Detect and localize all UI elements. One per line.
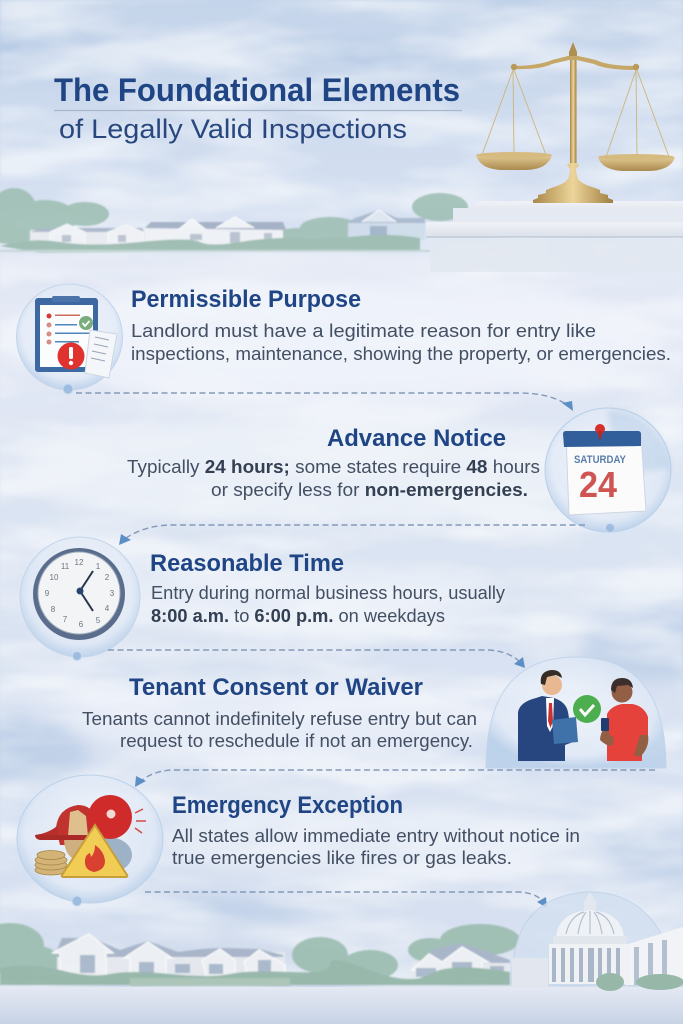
body text — [127, 456, 540, 500]
body text: or specify less for non-emergencies. — [211, 479, 528, 500]
trees — [0, 923, 520, 985]
panel: tenant consent or waiver — [82, 657, 666, 768]
icon: wall clock: 4 — [105, 604, 110, 613]
icon: wall clock: 7 — [63, 615, 68, 624]
body text: Entry during normal business hours, usually — [151, 582, 506, 603]
panel: permissible purpose — [16, 284, 671, 390]
side building left — [512, 958, 548, 988]
body text: inspections, maintenance, showing the property, or emergencies. — [131, 343, 671, 364]
panel: advance notice — [127, 408, 671, 532]
heading: Permissible Purpose — [131, 286, 361, 313]
body text: Typically 24 hours; some states require 48 hours — [127, 456, 540, 477]
heading: Tenant Consent or Waiver — [129, 674, 423, 701]
capitol dome — [556, 910, 624, 938]
arrow: step 4 to 5 — [135, 770, 655, 787]
body text — [151, 582, 506, 626]
icon: wall clock: 5 — [96, 616, 101, 625]
hedges and lawn — [0, 960, 510, 985]
heading: Reasonable Time — [150, 550, 344, 577]
arrow: step 1 to 2 — [63, 384, 573, 411]
left pan — [476, 70, 552, 170]
icon: emergency gear bubble — [17, 775, 163, 903]
arrow: step 3 to 4 — [72, 650, 525, 668]
trees — [0, 188, 468, 244]
body text — [172, 825, 580, 868]
marble pedestal — [426, 201, 683, 272]
icon: wall clock: 9 — [45, 589, 50, 598]
icon: wall clock: 2 — [105, 573, 110, 582]
blue house right — [346, 210, 425, 240]
bottom neighborhood landscape — [0, 923, 520, 986]
warning triangle — [62, 825, 127, 877]
icon: wall clock: 6 — [79, 620, 84, 629]
water band at bottom — [0, 987, 683, 1024]
icon: clipboard checklist — [16, 284, 122, 390]
heading: Advance Notice — [327, 425, 506, 452]
right pan — [598, 70, 675, 171]
landlord — [518, 670, 578, 761]
body text — [131, 320, 671, 364]
coins — [35, 850, 67, 875]
heading: Emergency Exception — [172, 792, 403, 819]
icon: wall clock: 12 — [75, 558, 84, 567]
helmet — [56, 805, 96, 845]
icon: wall clock: 3 — [110, 589, 115, 598]
body text — [82, 708, 477, 751]
body text: All states allow immediate entry without notice in — [172, 825, 580, 846]
houses right — [412, 943, 510, 979]
icon: calendar: 24 — [579, 464, 617, 505]
capitol colonnade — [549, 944, 629, 984]
icon: calendar — [545, 408, 671, 532]
arrow: step 2 to 3 — [119, 524, 614, 545]
arrow: step 5 to capitol — [72, 892, 547, 908]
icon: landlord and tenant scene — [486, 657, 666, 768]
body text: Tenants cannot indefinitely refuse entry but can — [82, 708, 477, 729]
tenant — [600, 678, 648, 761]
water band below top scene — [0, 253, 426, 277]
icon: wall clock: 8 — [51, 605, 56, 614]
title — [54, 72, 462, 144]
alarm bell — [88, 795, 132, 839]
side building right — [625, 927, 683, 985]
icon: calendar: SATURDAY — [574, 454, 627, 466]
body text: 8:00 a.m. to 6:00 p.m. on weekdays — [151, 605, 445, 626]
icon: capitol building bubble — [512, 892, 683, 991]
body text: true emergencies like fires or gas leaks. — [172, 847, 512, 868]
gas cylinder — [84, 837, 132, 873]
scale stand — [511, 42, 639, 203]
icon: wall clock: 10 — [50, 573, 59, 582]
scales of justice on marble pedestal — [426, 42, 683, 272]
panel: emergency exception — [17, 775, 580, 903]
body text: Landlord must have a legitimate reason for entry like — [131, 320, 596, 341]
icon: wall clock: 1 — [96, 562, 101, 571]
title line 1: The Foundational Elements — [54, 72, 460, 108]
houses left — [30, 217, 286, 246]
panel: reasonable time — [20, 537, 506, 657]
hedges — [0, 235, 420, 253]
check badge — [573, 695, 601, 723]
title line 2: of Legally Valid Inspections — [59, 114, 407, 144]
body text: request to reschedule if not an emergency. — [120, 730, 473, 751]
top neighborhood landscape — [0, 188, 468, 253]
row of houses left — [52, 934, 285, 976]
icon: wall clock: 11 — [61, 562, 70, 571]
icon: wall clock — [20, 537, 140, 657]
